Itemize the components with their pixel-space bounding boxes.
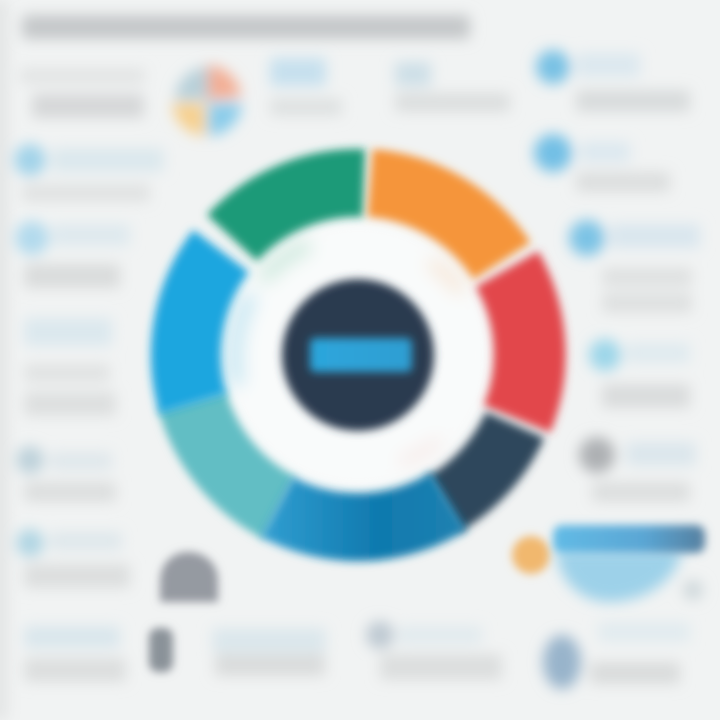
left block 4 bbox=[24, 318, 116, 416]
left block 3 bbox=[15, 221, 130, 288]
top block 2 bbox=[395, 62, 510, 112]
segment: red bbox=[507, 269, 530, 419]
icon: dark pillar bbox=[149, 628, 173, 672]
right block 2 bbox=[534, 134, 670, 192]
left block 6 bbox=[16, 529, 130, 588]
left column text blocks bbox=[14, 68, 164, 682]
right column text blocks bbox=[534, 50, 700, 502]
bottom row blocks bbox=[149, 552, 690, 689]
donut chart bbox=[186, 183, 530, 527]
right block 3 bbox=[569, 220, 700, 313]
left block 2 bbox=[14, 144, 164, 202]
segment: light blue bbox=[186, 251, 221, 404]
left block 1 bbox=[20, 68, 145, 118]
title bbox=[22, 15, 470, 39]
right block 1 bbox=[536, 50, 690, 112]
bottom block 2 bbox=[366, 621, 502, 680]
callout header bar bbox=[553, 525, 705, 553]
highlighted callout bbox=[512, 525, 705, 602]
segment: orange bbox=[370, 183, 502, 261]
left block 5 bbox=[16, 446, 116, 502]
left block 7 bbox=[24, 626, 126, 682]
segment: dark blue bbox=[277, 501, 449, 527]
bottom block 1 bbox=[212, 628, 326, 676]
bottom block 3 bbox=[543, 622, 690, 689]
right block 5 bbox=[579, 437, 696, 502]
top block 1 bbox=[270, 58, 342, 116]
callout body bbox=[556, 550, 703, 602]
segment: green bbox=[232, 183, 364, 238]
segment: navy bbox=[444, 425, 515, 504]
centre label pill bbox=[310, 338, 412, 372]
pie icon bbox=[172, 65, 242, 136]
top row text blocks bbox=[270, 58, 510, 116]
centre disc bbox=[282, 279, 434, 431]
icon: orange circle bbox=[512, 536, 550, 574]
icon: dark badge bbox=[160, 552, 218, 602]
segment: teal bbox=[192, 400, 280, 508]
ring inner halo bbox=[220, 217, 496, 493]
right block 4 bbox=[589, 339, 690, 408]
